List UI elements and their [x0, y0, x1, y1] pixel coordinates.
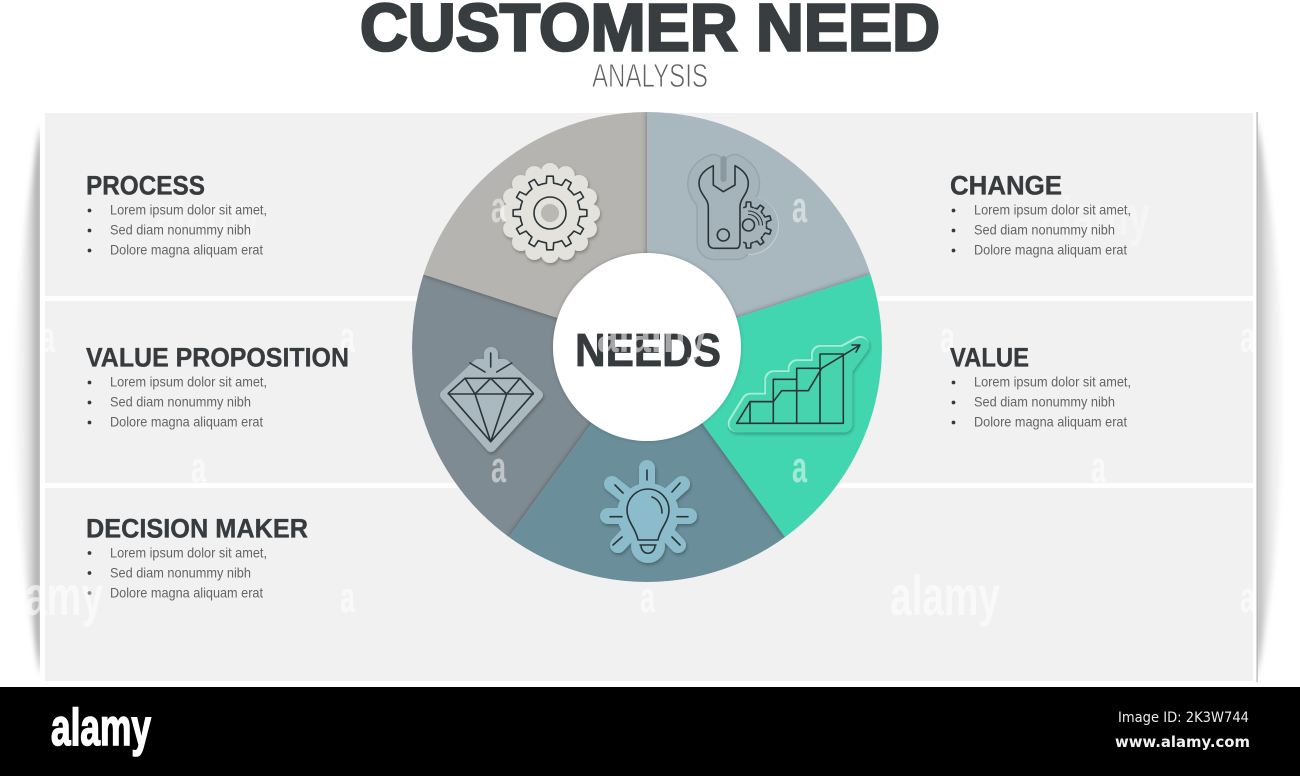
wheel segments	[412, 112, 882, 582]
watermark text in panels: a	[640, 573, 655, 622]
text block: process: Lorem ipsum dolor sit amet,	[110, 202, 267, 218]
text block: process: Dolore magna aliquam erat	[110, 242, 263, 258]
watermark text in panels: a	[40, 313, 55, 362]
watermark letters on wheel: a	[792, 183, 807, 232]
icon: diamond	[445, 353, 538, 447]
footer bar	[0, 687, 1300, 776]
text block: change: Dolore magna aliquam erat	[974, 242, 1127, 258]
watermark text in panels	[25, 184, 1255, 627]
watermark over center label: alamy	[597, 307, 707, 363]
text block: decision maker	[86, 514, 308, 601]
text block: decision maker: DECISION MAKER	[86, 514, 308, 544]
text block: value: Lorem ipsum dolor sit amet,	[974, 374, 1131, 390]
text block: decision maker: Lorem ipsum dolor sit amet,	[110, 545, 267, 561]
watermark text in panels: alamy	[890, 564, 1000, 627]
watermark letters on wheel: a	[491, 443, 506, 492]
icon: growth chart	[737, 345, 861, 424]
watermark text in panels: amy	[25, 564, 103, 627]
panel: row backgrounds	[45, 113, 1253, 681]
text block: change: Sed diam nonummy nibh	[974, 222, 1115, 238]
watermark letters on wheel: a	[792, 443, 807, 492]
subtitle: ANALYSIS	[592, 57, 708, 94]
center label: NEEDS	[575, 324, 721, 376]
text block: value proposition: Lorem ipsum dolor sit amet,	[110, 374, 267, 390]
text block: value proposition: VALUE PROPOSITION	[86, 342, 349, 372]
website: www.alamy.com	[1115, 733, 1250, 751]
text block: value: Dolore magna aliquam erat	[974, 414, 1127, 430]
text block: change: Lorem ipsum dolor sit amet,	[974, 202, 1131, 218]
watermark text in panels: a	[1091, 443, 1106, 492]
watermark text in panels: alamy	[155, 184, 260, 247]
text block: decision maker: Dolore magna aliquam erat	[110, 585, 263, 601]
segment: process	[424, 112, 647, 320]
watermark text in panels: alamy	[1040, 184, 1150, 247]
text block: process: PROCESS	[86, 170, 205, 200]
text block: value	[950, 342, 1131, 430]
text block: value proposition	[86, 342, 349, 430]
text block: value proposition: Sed diam nonummy nibh	[110, 394, 251, 410]
watermark text in panels: a	[1240, 313, 1255, 362]
segment: value proposition	[412, 274, 592, 537]
center circle	[553, 253, 741, 441]
watermark text in panels: a	[1240, 573, 1255, 622]
text block: change	[950, 170, 1131, 258]
text block: value proposition: Dolore magna aliquam erat	[110, 414, 263, 430]
icon: light bulb	[608, 468, 689, 563]
text block: decision maker: Sed diam nonummy nibh	[110, 565, 251, 581]
segment: value	[700, 272, 882, 538]
watermark text in panels: a	[940, 313, 955, 362]
watermark text in panels: a	[191, 443, 206, 492]
icon: wrench and gear	[699, 156, 779, 255]
watermark letters on wheel: a	[491, 183, 506, 232]
icon: gear	[500, 163, 600, 263]
image id: Image ID: 2K3W744	[1118, 710, 1249, 726]
segment: decision maker	[508, 422, 785, 582]
logo: alamy	[51, 699, 151, 757]
right panel shadow	[1230, 100, 1283, 690]
text block: change: CHANGE	[950, 170, 1062, 200]
watermark letters on wheel	[491, 183, 807, 492]
text block: process	[86, 170, 267, 258]
text block: process: Sed diam nonummy nibh	[110, 222, 251, 238]
left panel shadow	[16, 100, 70, 690]
segment: change	[644, 112, 870, 318]
text block: value: VALUE	[950, 342, 1029, 372]
text block: value: Sed diam nonummy nibh	[974, 394, 1115, 410]
watermark text in panels: a	[340, 573, 355, 622]
watermark text in panels: a	[340, 313, 355, 362]
chart: needs wheel	[412, 112, 882, 582]
